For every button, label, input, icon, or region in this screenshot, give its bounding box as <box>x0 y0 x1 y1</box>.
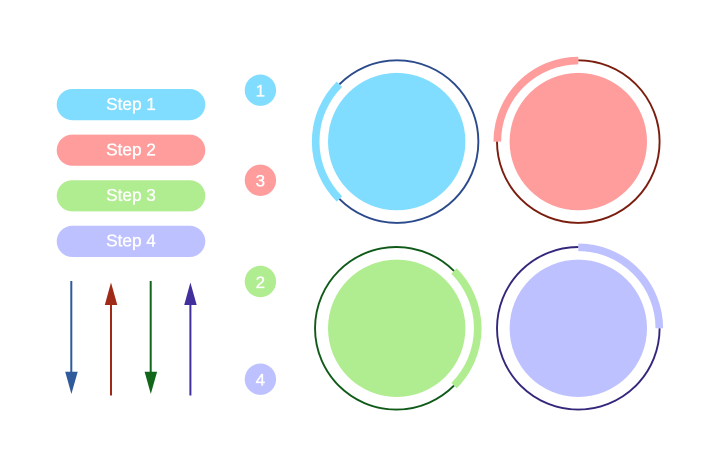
number badge 2 <box>245 266 276 297</box>
pill: step 4 <box>57 226 205 257</box>
number badge 2: 2 <box>256 273 265 292</box>
number badge 1 <box>245 74 276 106</box>
ring chart: purple <box>497 247 660 410</box>
pill: step 2: Step 2 <box>106 139 156 159</box>
number badge 4 <box>245 364 276 395</box>
ring chart: green <box>315 247 478 410</box>
arrow: red up <box>105 282 117 396</box>
ring chart: red <box>497 60 660 223</box>
arrow: purple up <box>184 282 197 396</box>
pill: step 1: Step 1 <box>106 94 156 114</box>
number badge 3: 3 <box>256 172 265 191</box>
number badge 4: 4 <box>256 370 265 390</box>
pill: step 1 <box>57 89 205 120</box>
number badge 1: 1 <box>256 82 265 100</box>
number badge 3 <box>245 165 276 196</box>
step legend <box>57 89 205 257</box>
arrows <box>65 281 197 396</box>
pill: step 3 <box>57 180 205 211</box>
arrow: green down <box>145 281 157 394</box>
pill: step 4: Step 4 <box>106 231 156 251</box>
ring chart: blue <box>316 60 478 223</box>
pill: step 2 <box>57 135 205 166</box>
arrow: blue down <box>65 281 78 394</box>
pill: step 3: Step 3 <box>106 185 156 205</box>
